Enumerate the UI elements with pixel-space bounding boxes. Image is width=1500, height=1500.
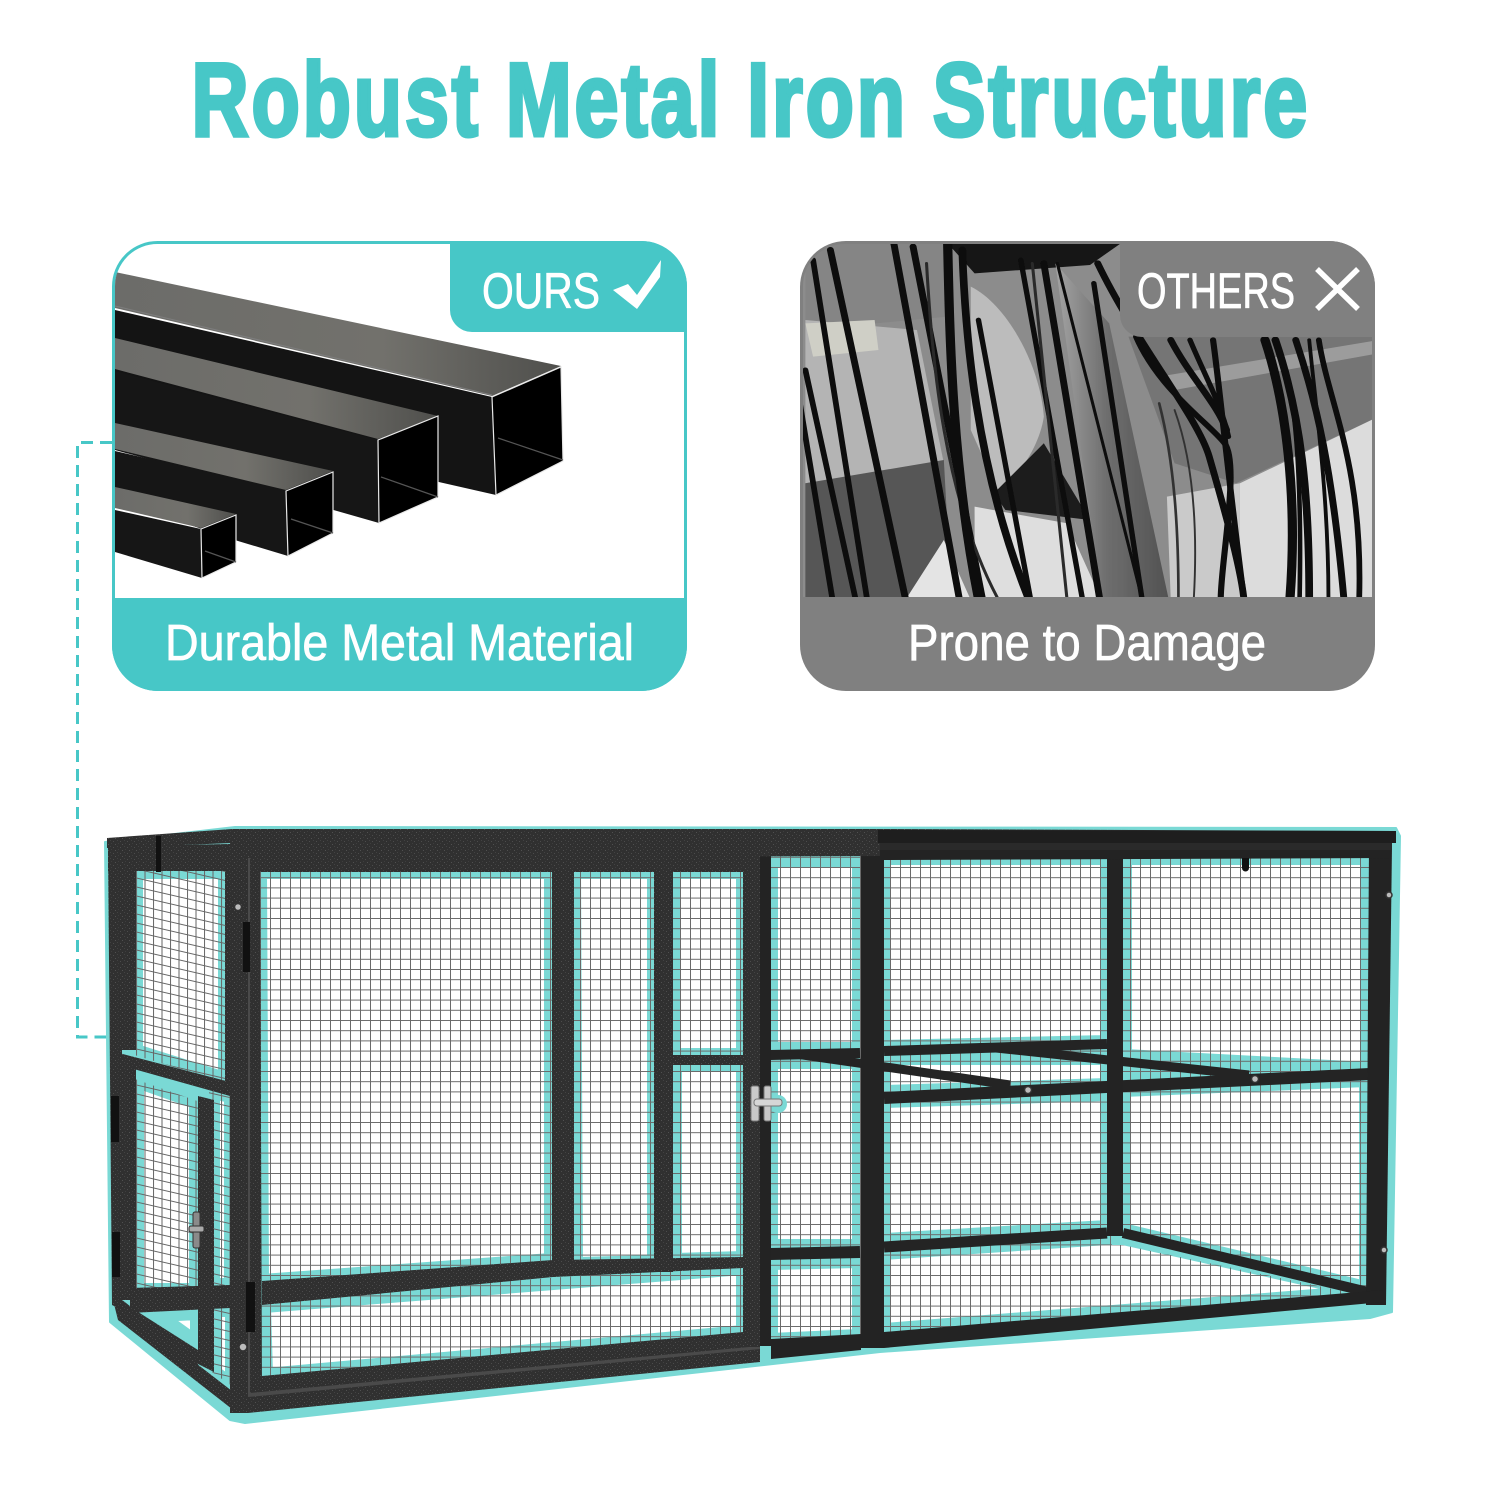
hardware: screws xyxy=(234,892,1392,1351)
ours caption bar xyxy=(112,598,687,691)
panel frame xyxy=(114,242,686,690)
teal outline silhouette xyxy=(105,827,1400,1423)
tube 1 xyxy=(115,272,563,495)
frame: front door section xyxy=(230,843,760,1413)
others label: OTHERS xyxy=(1137,263,1295,319)
frame: left side xyxy=(108,844,232,1409)
tube 3 xyxy=(115,423,333,556)
ours badge xyxy=(450,241,687,332)
frame: right section posts and rails xyxy=(760,845,1392,1359)
icon: cross mark xyxy=(1317,269,1358,309)
frame: roof band xyxy=(107,829,1396,858)
tube 2 xyxy=(115,338,438,523)
dashed connector xyxy=(78,442,112,1037)
ours label: OURS xyxy=(482,263,600,319)
mesh panes xyxy=(136,858,1368,1385)
title: Robust Metal Iron Structure xyxy=(192,41,1307,158)
frame: shelf and floor rails xyxy=(770,1044,1370,1292)
icon: check mark xyxy=(613,260,661,309)
panel: others xyxy=(790,230,1390,691)
hardware: hooks xyxy=(156,836,1249,872)
others badge xyxy=(1120,241,1375,337)
hardware: hinges xyxy=(111,922,255,1332)
wire mesh overlay: side xyxy=(131,867,235,1388)
frame: door seam underlay xyxy=(247,855,760,1399)
image: square metal tubes xyxy=(115,272,563,578)
product: metal cage with teal outline xyxy=(105,827,1400,1423)
tube 4 xyxy=(115,487,236,578)
image: damaged wire mesh xyxy=(790,230,1390,600)
hardware: side door latch xyxy=(189,1212,204,1248)
others caption: Prone to Damage xyxy=(908,614,1266,671)
wire mesh overlay: front and right xyxy=(255,853,1373,1380)
panel: ours xyxy=(112,241,687,691)
panel background xyxy=(800,241,1375,691)
hardware: front door latch xyxy=(751,1086,787,1121)
ours caption: Durable Metal Material xyxy=(165,614,634,671)
